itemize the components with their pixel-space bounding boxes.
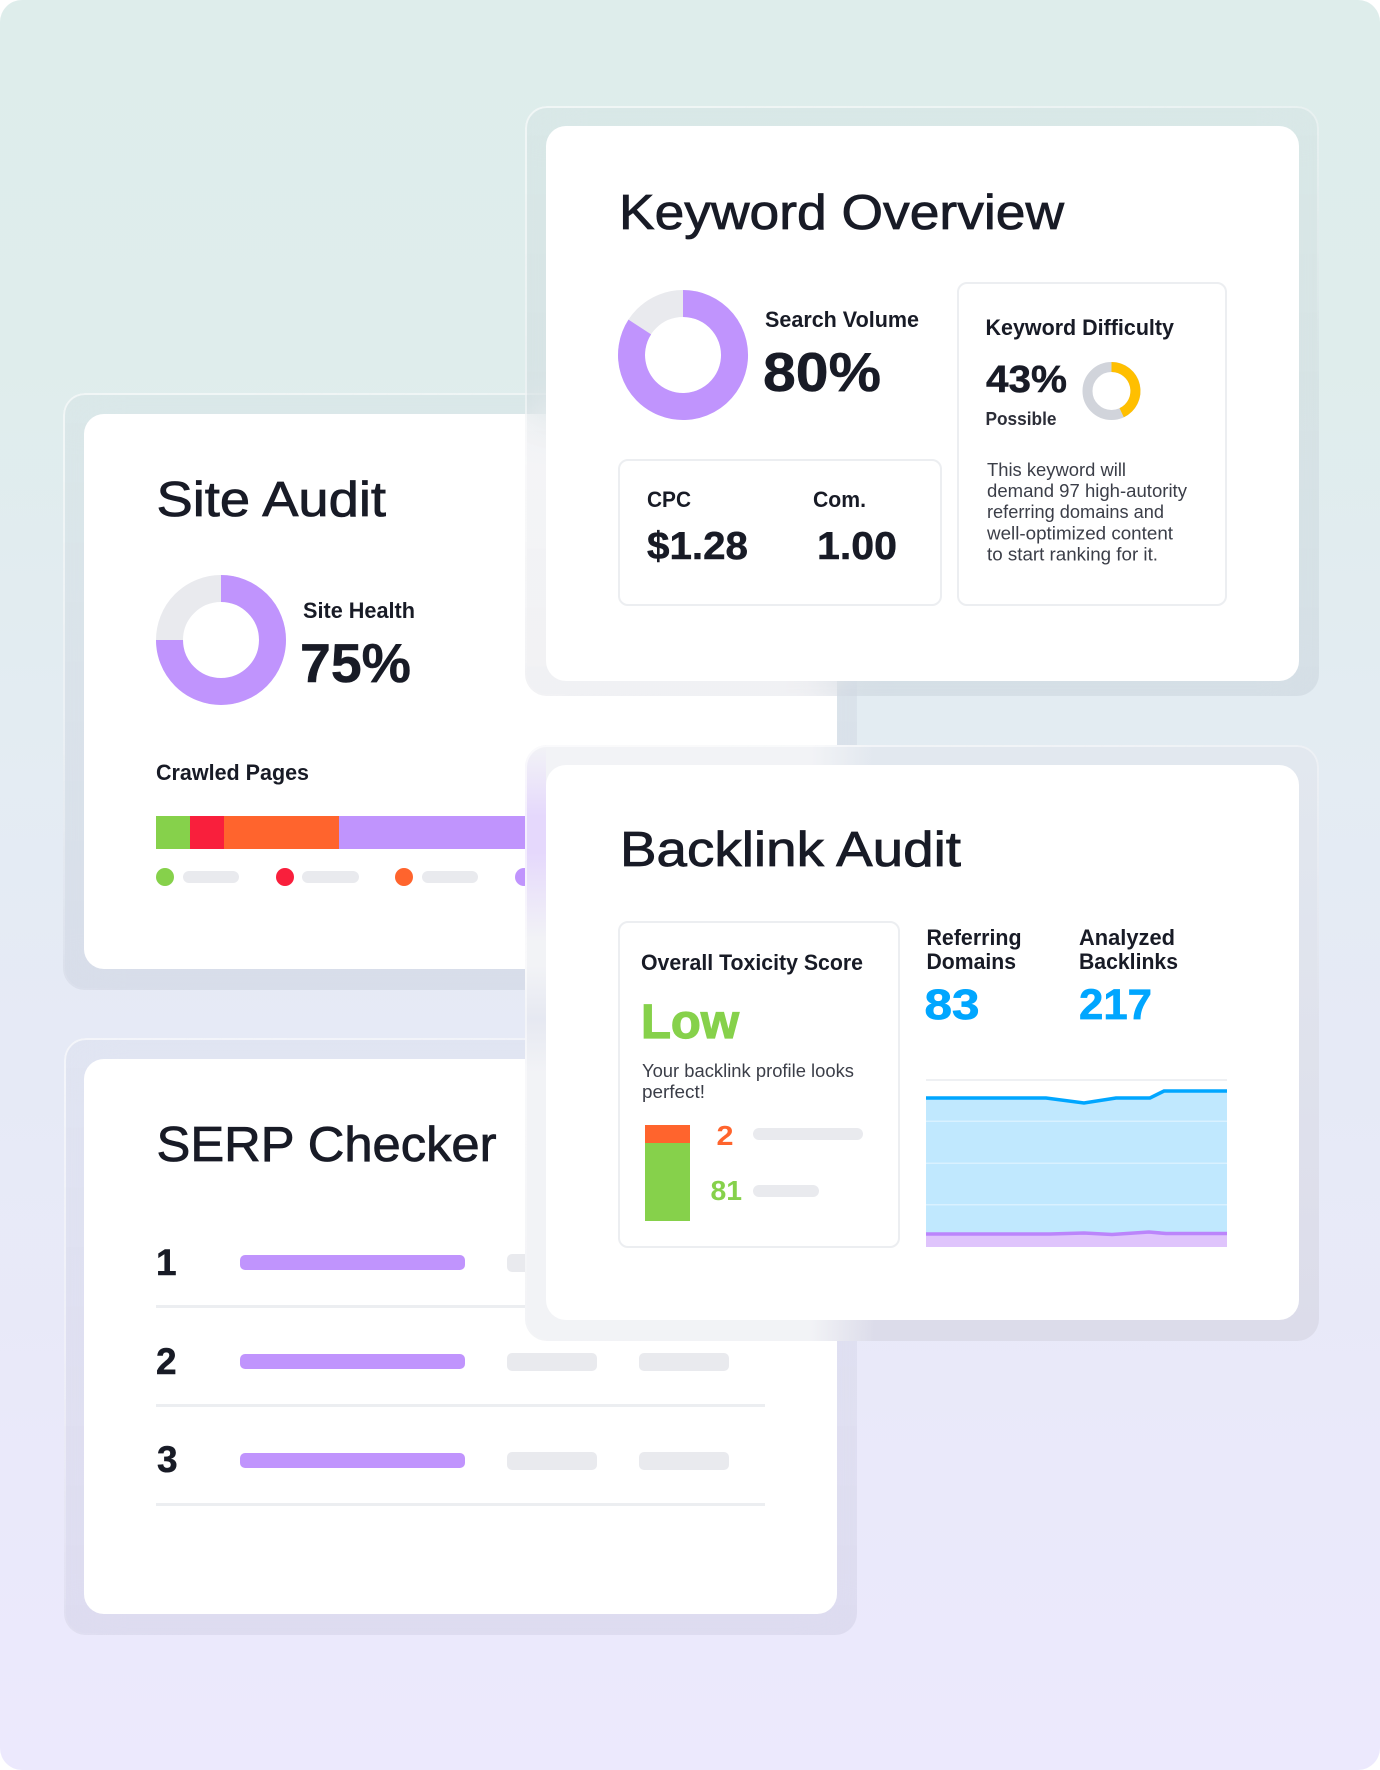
stacked bar: crawled pages (156, 816, 769, 849)
stat: analyzed backlinks: 217 (1079, 981, 1152, 1029)
label: search volume: Search Volume (765, 307, 919, 332)
panel: keyword overview (525, 106, 1319, 696)
box: cpc and competition: 1.00 (817, 525, 897, 568)
row 3: 3 (157, 1439, 178, 1480)
heading: site audit: Site Audit (156, 473, 386, 527)
heading: keyword overview: Keyword Overview (619, 186, 1065, 240)
donut chart: site health (170, 588, 272, 692)
label: site health: Site Health (303, 598, 415, 623)
box: keyword difficulty: to start ranking for it. (987, 544, 1158, 564)
box: cpc and competition: CPC (647, 487, 691, 512)
legend: crawled pages (156, 868, 533, 886)
box: keyword difficulty: demand 97 high-autority (987, 480, 1188, 501)
panel: backlink audit (525, 745, 1319, 1341)
value: search volume: 80% (763, 341, 881, 403)
box: cpc and competition (619, 460, 941, 605)
stat: referring domains: Referring (926, 925, 1022, 950)
box: overall toxicity score: Your backlink profile looks (642, 1060, 854, 1081)
stat: referring domains: 83 (924, 981, 980, 1029)
box: overall toxicity score: Low (641, 996, 740, 1049)
heading: serp checker: SERP Checker (156, 1118, 496, 1172)
heading: backlink audit: Backlink Audit (620, 823, 961, 877)
box: keyword difficulty: 43% (986, 359, 1067, 401)
stat: referring domains (924, 925, 1022, 1029)
value: site health: 75% (300, 632, 411, 694)
box: cpc and competition: $1.28 (647, 525, 748, 568)
box: keyword difficulty: well-optimized content (986, 522, 1173, 544)
box: keyword difficulty: This keyword will (987, 459, 1126, 480)
stat: analyzed backlinks (1079, 925, 1178, 1029)
donut chart: search volume (632, 304, 735, 406)
box: keyword difficulty: referring domains and (987, 501, 1164, 522)
box: keyword difficulty: Possible (986, 409, 1056, 429)
label: crawled pages: Crawled Pages (156, 760, 309, 785)
stat: referring domains: Domains (926, 949, 1016, 974)
box: overall toxicity score: perfect! (642, 1081, 705, 1102)
row 1 (156, 1242, 765, 1308)
stat: analyzed backlinks: Analyzed (1079, 925, 1175, 950)
row 1: 1 (156, 1242, 177, 1283)
box: overall toxicity score: 81 (710, 1175, 742, 1206)
panel: serp checker (64, 1038, 857, 1635)
box: keyword difficulty: Keyword Difficulty (986, 315, 1175, 340)
row 2 (156, 1341, 765, 1407)
box: keyword difficulty (958, 283, 1226, 605)
box: cpc and competition: Com. (813, 487, 866, 512)
box: overall toxicity score (619, 922, 899, 1247)
row 2: 2 (156, 1341, 177, 1382)
box: overall toxicity score: 2 (716, 1120, 734, 1151)
box: overall toxicity score: Overall Toxicity Score (641, 950, 863, 975)
area chart: backlinks over time (926, 1079, 1227, 1247)
row 3 (156, 1439, 765, 1506)
panel: site audit (63, 393, 857, 990)
stat: analyzed backlinks: Backlinks (1079, 949, 1178, 974)
